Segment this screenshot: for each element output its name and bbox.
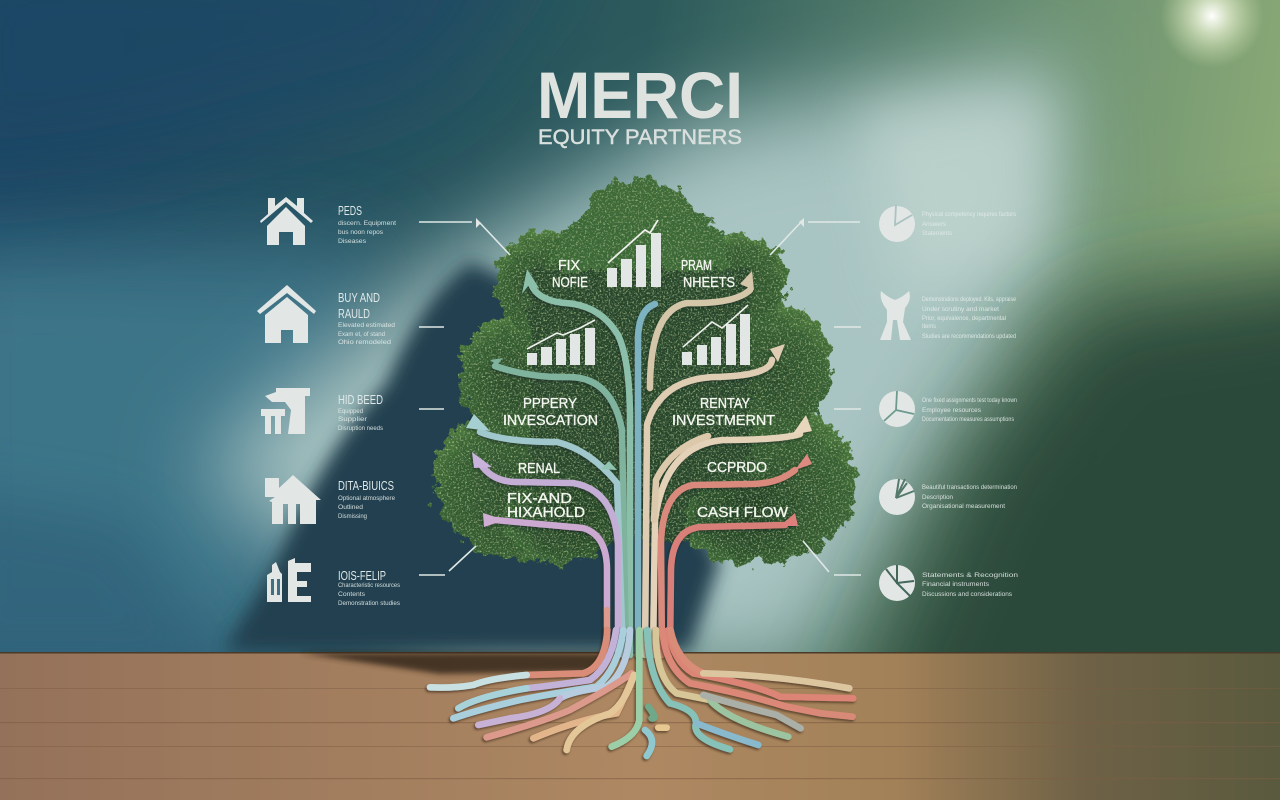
text: details: bus noon repos — [338, 229, 384, 236]
text: details: Answers — [922, 221, 947, 228]
chart: centre bar chart — [607, 220, 661, 287]
title — [537, 58, 743, 149]
pipe: purple lower left — [483, 513, 607, 610]
item: left 2 — [257, 285, 395, 346]
tree labels: NHEETS — [683, 274, 735, 291]
text: details: Under scrutiny and market — [922, 306, 999, 313]
title: company name: MERCI — [537, 58, 743, 132]
text: details: Items — [922, 323, 937, 330]
text: details: Ohio remodeled — [338, 339, 391, 346]
item: right 1 — [879, 205, 1017, 242]
text: details: One fixed assignments test today known — [922, 397, 1017, 404]
chart: right bar chart — [682, 305, 750, 365]
text: details — [922, 296, 1016, 340]
item: right 2 — [880, 291, 1016, 340]
pipe: beige upper right — [650, 271, 754, 388]
pipe: pink trunk base — [604, 610, 610, 655]
text: details — [338, 495, 395, 520]
text: details: Contents — [338, 591, 366, 598]
tree labels: FIX — [558, 257, 580, 274]
text: details: Supplier — [338, 416, 368, 423]
text: IOIS-FELIP: IOIS-FELIP — [338, 568, 386, 583]
text: details: Discussions and considerations — [922, 591, 1013, 598]
tree labels: CCPRDO — [707, 459, 767, 476]
text: details: Dismissing — [338, 513, 367, 520]
text: details: Outlined — [338, 504, 363, 511]
chart: left bar chart — [527, 320, 595, 365]
item: left 1 — [260, 197, 396, 245]
text: HID BEED: HID BEED — [338, 392, 383, 407]
text: details: Elevated estimated — [338, 322, 395, 329]
item: left 2: RAULD — [338, 306, 370, 321]
icon: building blocks — [261, 388, 310, 434]
icon: pie chart — [879, 479, 915, 515]
item: left 4 — [265, 475, 395, 524]
tree labels: INVESTMERNT — [672, 412, 775, 429]
text: details: Physical competency requires factors — [922, 211, 1017, 218]
text: details: Statements — [922, 230, 953, 237]
icon: house — [257, 285, 316, 343]
text: details — [338, 408, 384, 432]
icon: funnel shape — [880, 291, 911, 340]
text: details: Optional atmosphere — [338, 495, 395, 502]
pipe: blue centre — [638, 304, 655, 655]
text: details: Employee resources — [922, 407, 982, 414]
tree foliage — [433, 178, 856, 564]
text: details — [338, 322, 395, 346]
pipe: teal left — [466, 414, 623, 655]
text: details — [922, 211, 1017, 237]
text: details — [922, 572, 1018, 598]
pipe: short beige — [654, 436, 708, 520]
tree labels: RENTAY — [700, 395, 750, 412]
text: details: Characteristic resources — [338, 582, 401, 589]
connector lines — [419, 218, 861, 575]
text: details — [922, 397, 1017, 423]
text: details: Organisational measurement — [922, 503, 1005, 510]
text: details: Beautiful transactions determination — [922, 484, 1017, 491]
text: details — [338, 220, 396, 245]
text: DITA-BIUICS: DITA-BIUICS — [338, 478, 394, 493]
item: right 4 — [879, 479, 1017, 515]
icon: pie chart — [879, 565, 915, 601]
tree labels: HIXAHOLD — [507, 504, 585, 521]
icon: house with chimneys — [260, 197, 313, 245]
icon: house with garage — [265, 475, 321, 524]
tree labels: NOFIE — [552, 274, 588, 291]
pipe: purple upper left — [472, 452, 618, 655]
tree labels — [503, 257, 789, 521]
tree labels: PPPERY — [523, 395, 577, 412]
tree labels: INVESCATION — [503, 412, 598, 429]
pipe: beige third right — [653, 415, 812, 655]
tree labels: CASH FLOW — [697, 504, 789, 521]
text: details: Diseases — [338, 238, 367, 245]
item: right 5 — [879, 565, 1018, 601]
text: PEDS: PEDS — [338, 203, 362, 218]
item: right 3 — [879, 391, 1017, 427]
icon: pie chart — [879, 205, 915, 242]
tree labels: FIX-AND — [507, 490, 572, 507]
text: details: Financial instruments — [922, 581, 990, 588]
pipe: beige second right — [645, 344, 785, 655]
tree labels: RENAL — [518, 460, 560, 477]
tree shadow on wall — [225, 262, 720, 652]
text: details: Documentation measures assumptions — [922, 416, 1015, 423]
pipe: salmon upper right — [661, 454, 812, 655]
arrowhead: small teal — [601, 461, 617, 470]
text: details: Studies are recommendations updated — [922, 333, 1016, 340]
wooden floor — [0, 652, 1280, 800]
text: BUY AND RAULD: BUY AND — [338, 290, 380, 305]
item: left 3 — [261, 388, 384, 434]
text: details: discern. Equipment — [338, 220, 396, 227]
text: details: Description — [922, 494, 953, 501]
tree pipes: branches and trunk — [466, 269, 812, 655]
text: details: Demonstrations deployed. Kits, appraise — [922, 296, 1016, 303]
title: subtitle: EQUITY PARTNERS — [538, 126, 742, 149]
text: details — [338, 582, 401, 607]
text: details: Demonstration studies — [338, 600, 401, 607]
pipe: green upper left — [522, 269, 630, 655]
pipe: salmon lower right — [670, 513, 798, 655]
text: details: Statements & Recognition — [922, 572, 1018, 579]
text: details: Equipped — [338, 408, 363, 415]
text: details — [922, 484, 1017, 510]
icon: pie chart — [879, 391, 915, 427]
text: details: Disruption needs — [338, 425, 384, 432]
icon: buildings — [267, 558, 311, 602]
item: left 5 — [267, 558, 401, 607]
text: details: Exam et, of stand — [338, 331, 385, 338]
ground roots — [430, 630, 853, 756]
tree labels: PRAM — [681, 257, 712, 274]
pipe: light green second left — [490, 358, 626, 655]
text: details: Prior, equivalence, departmental — [922, 315, 1006, 322]
